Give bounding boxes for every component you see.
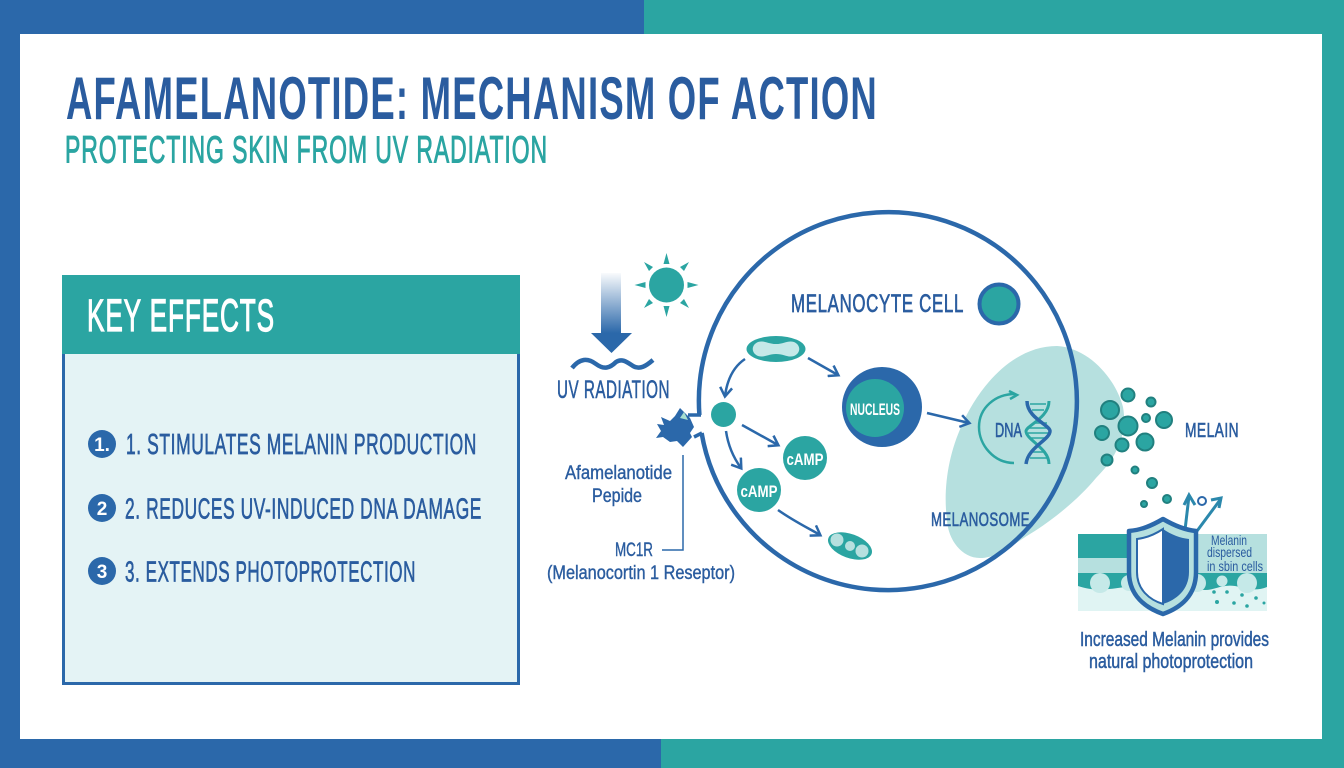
label: melain: MELAIN (1185, 420, 1239, 442)
label: melanin dispersed: Melanin (1211, 532, 1247, 548)
label: melanin dispersed: dispersed (1207, 544, 1252, 560)
effect 3 (88, 556, 416, 588)
nucleus (842, 367, 922, 447)
icon: cell legend (980, 284, 1018, 324)
label: melanosome: MELANOSOME (931, 510, 1030, 531)
melanin granules (1095, 388, 1172, 507)
melanocyte cell membrane (699, 212, 1077, 590)
label: mc1r (547, 540, 735, 584)
melanosome blob (946, 346, 1124, 558)
label: uv radiation: UV RADIATION (557, 376, 670, 404)
camp right: cAMP (786, 450, 824, 469)
camp right (783, 436, 827, 480)
panel heading: KEY EFFECTS (87, 290, 275, 341)
dna cycle arrow (979, 391, 1017, 463)
label: melanocyte cell: MELANOCYTE CELL (791, 290, 964, 318)
icon: dna helix (1026, 401, 1050, 464)
effect 2: 2. REDUCES UV-INDUCED DNA DAMAGE (125, 494, 482, 526)
icon: sun (634, 253, 698, 317)
panel header (62, 275, 520, 354)
signal node (711, 402, 736, 427)
label: dna: DNA (995, 420, 1022, 442)
label: afamelanotide peptide (565, 463, 672, 507)
camp left (737, 468, 781, 512)
organelle top (746, 336, 806, 362)
effect 1: 1. (94, 435, 110, 456)
effect 1: 1. STIMULATES MELANIN PRODUCTION (126, 429, 477, 461)
label: afamelanotide peptide: Pepide (592, 486, 642, 507)
label: melanin dispersed (1207, 532, 1263, 574)
camp left: cAMP (740, 482, 778, 501)
skin layers (1078, 534, 1267, 611)
caption: Increased Melanin provides (1080, 629, 1269, 651)
effect 2 (88, 494, 482, 526)
caption: natural photoprotection (1089, 651, 1253, 673)
label: mc1r: MC1R (615, 540, 653, 561)
label: melanin dispersed: in sbin cells (1207, 558, 1263, 574)
release arrows (1184, 495, 1221, 531)
pathway arrows (725, 358, 969, 535)
effect 3: 3 (97, 562, 107, 583)
subtitle: PROTECTING SKIN FROM UV RADIATION (65, 130, 548, 172)
caption (1080, 629, 1269, 673)
panel: key effects (62, 275, 520, 684)
effect 3: 3. EXTENDS PHOTOPROTECTION (125, 556, 416, 588)
label: mc1r: (Melanocortin 1 Reseptor) (547, 563, 735, 584)
icon: shield (1129, 519, 1196, 614)
effect 1 (88, 429, 477, 461)
effect 2: 2 (97, 499, 107, 520)
icon: uv arrow (572, 273, 653, 368)
label: afamelanotide peptide: Afamelanotide (565, 463, 672, 484)
afamelanotide peptide and receptor (656, 408, 702, 550)
nucleus: NUCLEUS (850, 400, 900, 419)
organelle bottom (824, 527, 876, 565)
